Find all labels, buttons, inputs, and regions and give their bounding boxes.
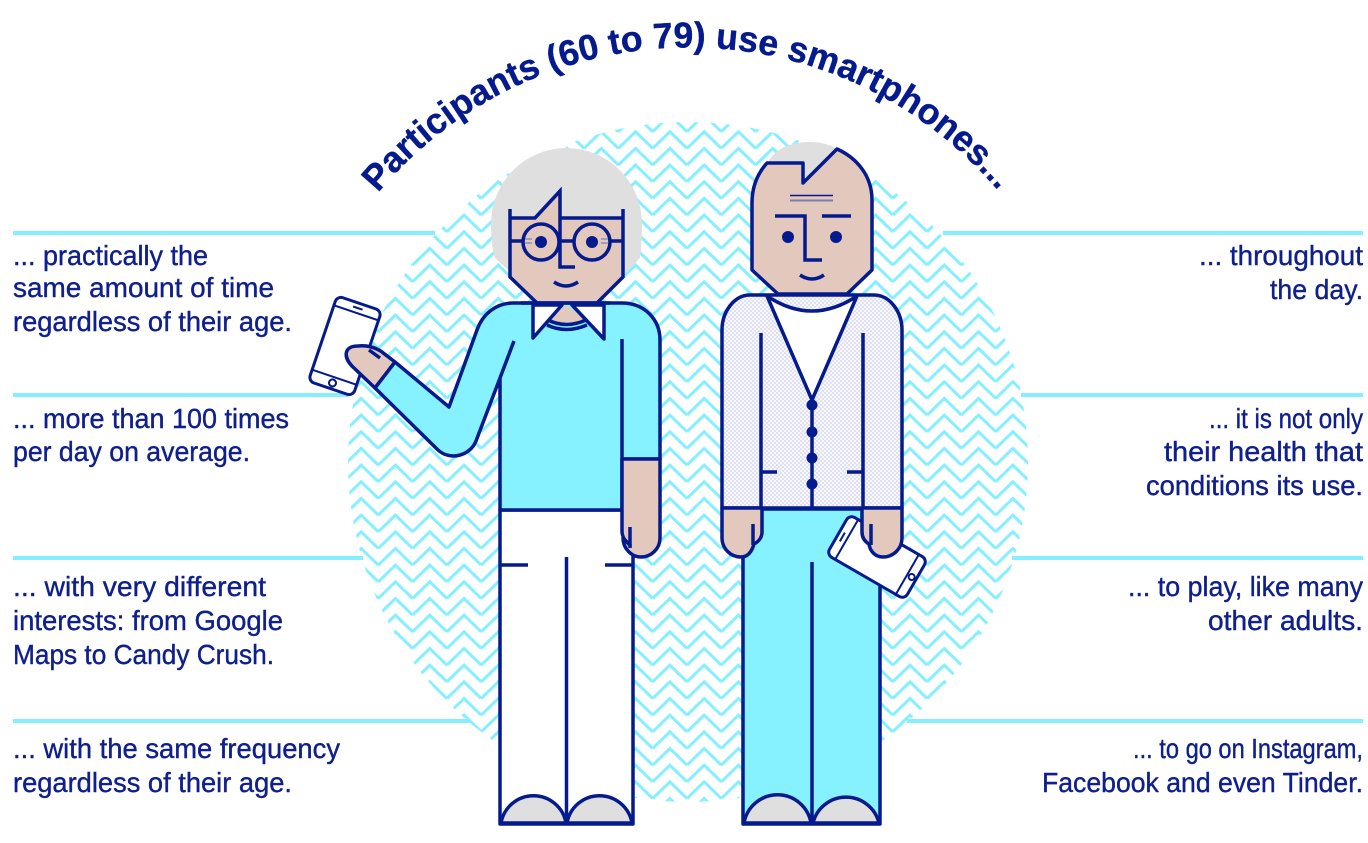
text block: throughout the day [1199, 240, 1363, 305]
text block: same amount of time [13, 240, 292, 337]
man face [752, 149, 872, 294]
woman left arm and hand [346, 346, 395, 388]
text block: social apps [1042, 733, 1363, 798]
man hair [767, 142, 838, 183]
text block: more than 100 times [13, 403, 289, 467]
text block: more than 100 times: ... more than 100 times [13, 403, 289, 434]
man left hand [722, 508, 762, 557]
woman phone [308, 296, 382, 396]
text block: more than 100 times: per day on average. [13, 436, 250, 467]
man neck [778, 294, 847, 310]
sweater details [500, 339, 622, 459]
man phone [827, 515, 927, 599]
man cardigan [722, 295, 902, 510]
woman hair [491, 148, 642, 290]
text block: not only health [1146, 403, 1363, 501]
text block: not only health: their health that [1164, 436, 1363, 467]
text block: different interests: Maps to Candy Crush. [13, 639, 274, 670]
zigzag background circle [348, 122, 1028, 802]
woman pants [500, 510, 633, 824]
woman figure [308, 148, 660, 824]
text block: same amount of time: same amount of time [13, 272, 274, 303]
text block: different interests: ... with very different [13, 571, 266, 602]
text block: same frequency: regardless of their age. [13, 767, 292, 798]
text block: same amount of time: regardless of their age. [13, 306, 292, 337]
woman hand right [622, 459, 660, 557]
woman face [510, 191, 623, 303]
title: Participants (60 to 79) use smartphones... [360, 21, 1001, 192]
divider lines left [13, 231, 470, 723]
woman neckline and collar [521, 303, 610, 339]
text block: to play: other adults. [1208, 605, 1363, 636]
text block: to play: ... to play, like many [1128, 571, 1363, 602]
man figure [722, 142, 927, 824]
text block: different interests [13, 571, 283, 670]
text block: not only health: conditions its use. [1146, 470, 1363, 501]
man pants [743, 509, 880, 824]
text block: same frequency: ... with the same frequency [13, 733, 340, 764]
text block: different interests: interests: from Google [13, 605, 283, 636]
text block: throughout the day: the day. [1270, 274, 1363, 305]
divider lines right [907, 231, 1363, 723]
text block: same amount of time: ... practically the [13, 240, 208, 271]
man right hand [862, 508, 902, 557]
text block: same frequency [13, 733, 340, 798]
text block: throughout the day: ... throughout [1199, 240, 1363, 271]
text block: to play [1128, 571, 1363, 636]
woman sweater [375, 303, 660, 510]
